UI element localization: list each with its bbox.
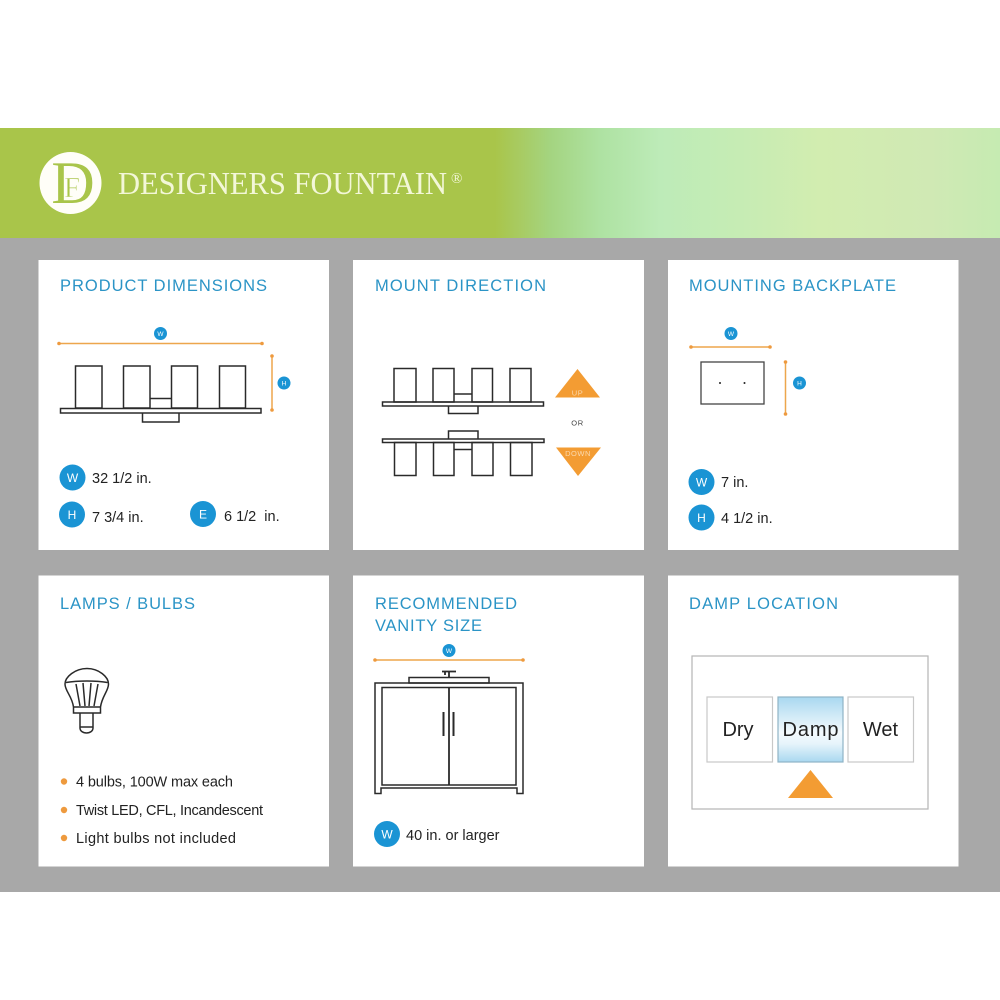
width value: 7 in. [721, 475, 748, 491]
width dimension line: W [157, 331, 164, 338]
heading: product dimensions: PRODUCT DIMENSIONS [60, 277, 267, 295]
panel: mount direction [353, 260, 644, 550]
down arrow: DOWN [565, 449, 591, 458]
dry box: Dry [722, 719, 754, 741]
fixture mounted up [382, 368, 544, 414]
width value [688, 469, 748, 495]
width dimension line: W [728, 331, 735, 338]
vanity width value [374, 821, 500, 847]
height dimension line [784, 360, 806, 416]
width dimension line: W [446, 648, 453, 655]
down arrow [556, 448, 601, 476]
height value: 7 3/4 in. [92, 510, 144, 526]
heading: mount direction: MOUNT DIRECTION [375, 277, 546, 295]
panel: recommended vanity size [353, 576, 644, 866]
logo: DF monogram [40, 150, 102, 216]
heading: recommended vanity size: RECOMMENDED [375, 595, 517, 613]
brand name: DESIGNERS FOUNTAIN [118, 165, 447, 201]
width dimension line [57, 327, 264, 345]
height dimension line: H [797, 380, 802, 388]
width value: W [696, 476, 708, 490]
heading: recommended vanity size [375, 595, 517, 635]
wet box [848, 697, 914, 762]
bulb facts list: Light bulbs not included [76, 831, 236, 847]
fixture mounted down [382, 431, 544, 476]
height dimension line [270, 354, 290, 412]
grey background band [0, 238, 1000, 892]
height value: H [68, 508, 76, 522]
width value [60, 464, 152, 490]
width value: 32 1/2 in. [92, 471, 152, 487]
bulb facts list [61, 774, 263, 847]
damp box [778, 697, 843, 762]
panel: lamps and bulbs [38, 576, 329, 866]
vanity width value: W [381, 828, 393, 842]
width value: W [67, 471, 79, 485]
heading: damp location: DAMP LOCATION [689, 595, 838, 613]
dry box [707, 697, 772, 762]
arrow pointing at damp [788, 770, 833, 798]
width dimension line [373, 644, 525, 662]
heading: recommended vanity size: VANITY SIZE [375, 617, 482, 635]
header banner [0, 128, 1000, 238]
panel: damp location [668, 576, 958, 866]
or label: OR [571, 418, 584, 428]
height value [59, 502, 144, 528]
up arrow [555, 369, 600, 398]
vanity drawing [375, 672, 523, 794]
up arrow: UP [572, 388, 583, 398]
location rating frame [692, 656, 928, 809]
panel: mounting backplate [668, 260, 958, 550]
extension value: 6 1/2 in. [224, 509, 280, 525]
damp box: Damp [782, 719, 838, 741]
height dimension line: H [282, 380, 287, 388]
bulb facts list: 4 bulbs, 100W max each [76, 774, 233, 790]
panel: product dimensions [38, 260, 329, 550]
heading: mounting backplate: MOUNTING BACKPLATE [689, 277, 896, 295]
extension value [190, 501, 280, 527]
width dimension line [689, 327, 772, 349]
height value: H [697, 511, 706, 525]
height value: 4 1/2 in. [721, 511, 773, 527]
logo: DF monogram: F [64, 172, 80, 204]
logo: DF monogram: D [51, 150, 95, 216]
height value [688, 504, 773, 530]
light fixture drawing [60, 366, 261, 422]
heading: lamps and bulbs: LAMPS / BULBS [60, 595, 195, 613]
vanity width value: 40 in. or larger [406, 828, 500, 844]
icon: light bulb [65, 668, 108, 733]
registered mark: ® [451, 171, 462, 187]
backplate drawing [701, 362, 764, 404]
wet box: Wet [863, 719, 899, 741]
extension value: E [199, 508, 207, 522]
bulb facts list: Twist LED, CFL, Incandescent [76, 803, 263, 819]
